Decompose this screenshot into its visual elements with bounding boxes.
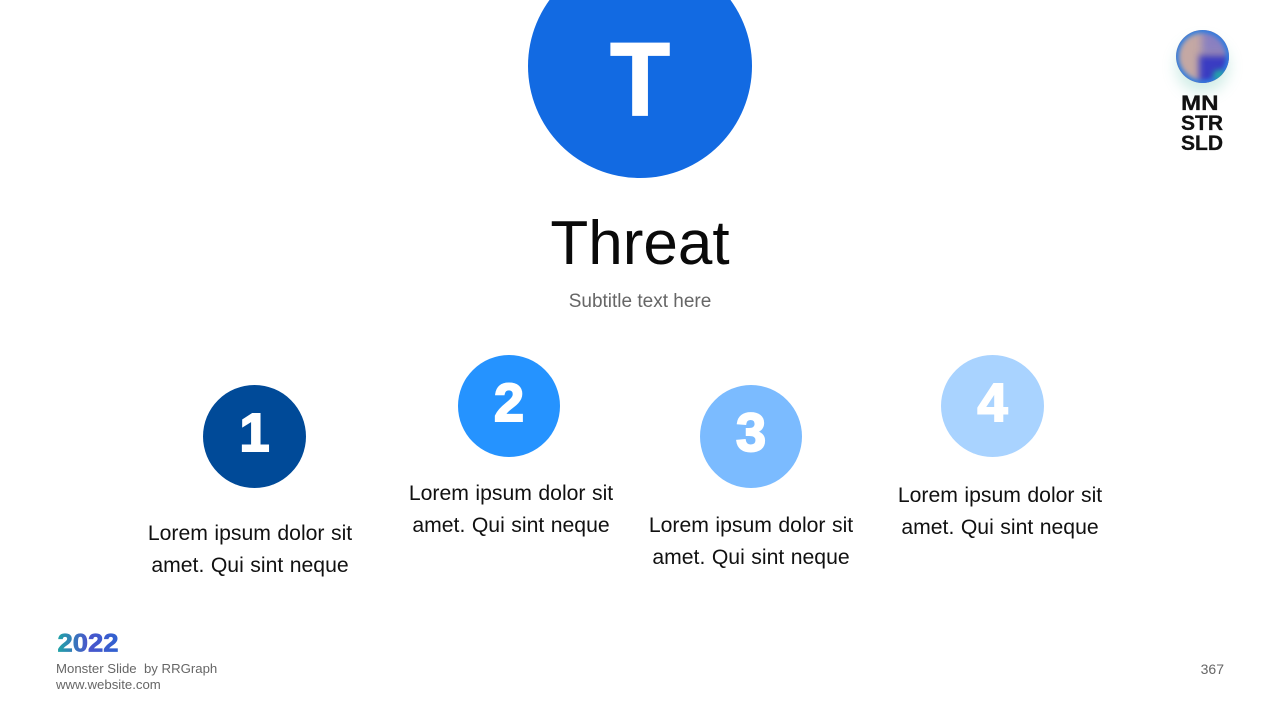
step 4 text: Lorem ipsum dolor sit [898, 484, 1102, 507]
step 2 text [409, 482, 613, 536]
step 4 text [898, 484, 1102, 538]
step 2 circle [458, 355, 560, 457]
big circle with letter T: T [610, 22, 670, 138]
step 1 circle [203, 385, 306, 488]
step 1 text: Lorem ipsum dolor sit [148, 522, 352, 545]
logo wordmark: SLD [1181, 132, 1223, 155]
step 4 circle [941, 355, 1044, 457]
step 3 circle [700, 385, 802, 488]
page number: 367 [1201, 661, 1224, 677]
step 1 text: amet. Qui sint neque [151, 554, 349, 576]
logo [1170, 30, 1234, 155]
footer credit [56, 661, 217, 692]
subtitle: Subtitle text here [569, 291, 711, 312]
step 3 text: amet. Qui sint neque [652, 546, 850, 568]
logo wordmark: STR [1181, 112, 1223, 135]
step 1 text [148, 522, 352, 576]
step 4 circle: 4 [977, 373, 1008, 433]
step 3 circle: 3 [736, 403, 766, 463]
footer credit: Monster Slide by RRGraph [56, 661, 217, 676]
step 4 text: amet. Qui sint neque [901, 516, 1099, 538]
footer credit: www.website.com [56, 677, 161, 692]
logo wordmark: MN [1181, 92, 1219, 115]
step 3 text: Lorem ipsum dolor sit [649, 514, 853, 537]
step 2 text: Lorem ipsum dolor sit [409, 482, 613, 505]
step 2 circle: 2 [494, 373, 524, 433]
big circle with letter T [528, 0, 752, 178]
step 2 text: amet. Qui sint neque [412, 514, 610, 536]
logo wordmark [1181, 92, 1223, 155]
step 1 circle: 1 [239, 403, 270, 463]
logo sphere [1176, 30, 1229, 83]
step 3 text [649, 514, 853, 568]
title: Threat [550, 208, 730, 278]
